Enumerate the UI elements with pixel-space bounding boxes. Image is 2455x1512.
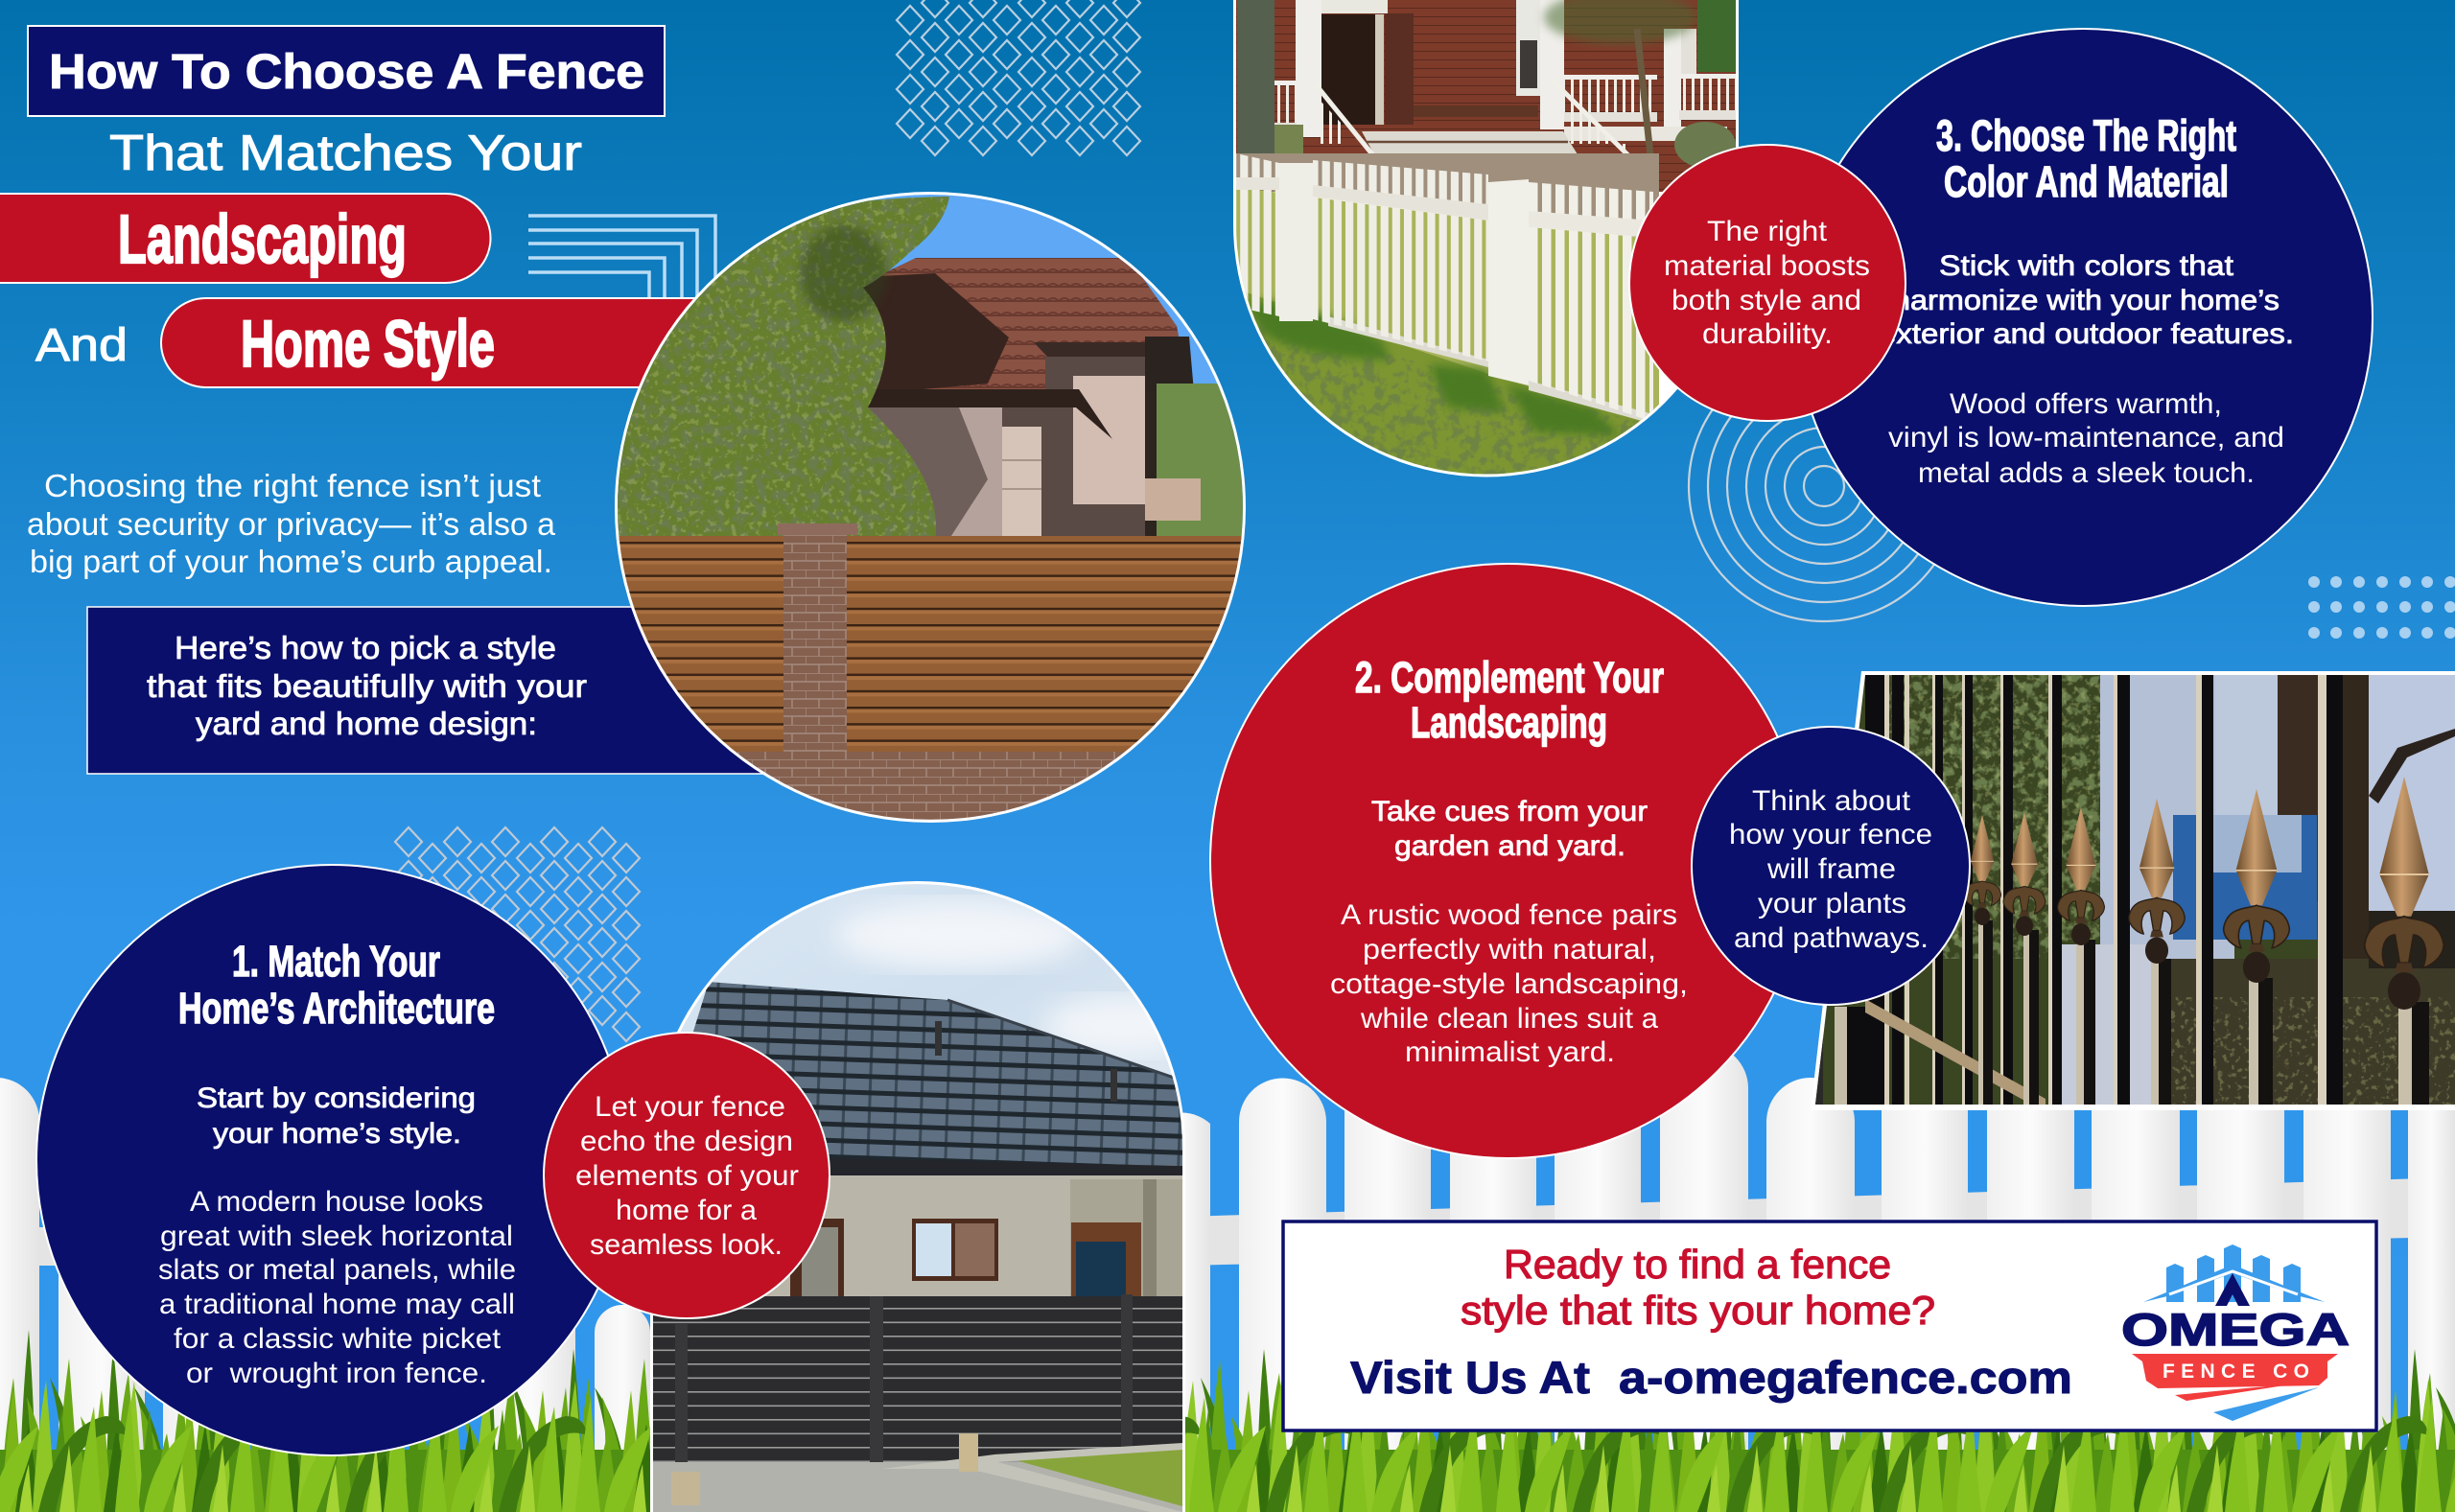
dot grid decoration <box>2308 576 2455 639</box>
panel: step 2 complement your landscaping: Landscaping <box>1411 698 1607 747</box>
panel: step 2 complement your landscaping: while clean lines suit a <box>1360 1003 1658 1035</box>
photo: wrought iron fence <box>1811 671 2455 1112</box>
photo: white picket fence and porch <box>1232 0 1741 479</box>
call to action banner: style that fits your home? <box>1461 1288 1935 1333</box>
grass: right <box>1185 1320 2455 1512</box>
intro paragraph: big part of your home’s curb appeal. <box>30 544 552 579</box>
callout circle: frame your plants <box>1692 727 1970 1005</box>
call to action banner: Visit Us At <box>1350 1352 1590 1403</box>
call to action banner <box>1283 1221 2376 1431</box>
panel: step 1 match your architecture: your home’s style. <box>213 1118 461 1150</box>
panel: step 2 complement your landscaping: perfectly with natural, <box>1363 934 1656 965</box>
photo: modern house with dark slat fence <box>647 877 1199 1512</box>
decorative diamond pattern: top <box>897 0 1140 155</box>
photo: house with wood fence <box>614 187 1248 828</box>
panel: step 1 match your architecture: a traditional home may call <box>159 1289 515 1320</box>
panel: step 1 match your architecture: for a classic white picket <box>174 1323 502 1355</box>
panel: step 1 match your architecture: Start by considering <box>197 1082 476 1114</box>
panel: step 3 color and material: 3. Choose The Right <box>1936 111 2236 160</box>
callout circle: frame your plants: and pathways. <box>1734 922 1929 954</box>
decorative diamond pattern: left <box>395 827 640 1041</box>
concentric circle decoration <box>1689 351 1959 621</box>
logo: Omega Fence Co: OMEGA <box>2121 1304 2350 1355</box>
title box <box>28 26 665 116</box>
callout circle: echo the design: seamless look. <box>590 1229 783 1261</box>
panel: step 1 match your architecture <box>36 865 627 1455</box>
callout circle: material boosts: durability. <box>1702 318 1833 350</box>
panel: step 2 complement your landscaping: cottage-style landscaping, <box>1330 968 1688 1000</box>
panel: step 1 match your architecture: slats or metal panels, while <box>158 1254 516 1286</box>
pill: Landscaping <box>0 194 491 283</box>
panel: step 2 complement your landscaping: 2. Complement Your <box>1355 653 1664 702</box>
callout box: how to pick <box>87 607 778 774</box>
callout circle: material boosts: both style and <box>1672 285 1861 316</box>
panel: step 1 match your architecture: great with sleek horizontal <box>160 1221 513 1252</box>
logo: Omega Fence Co: FENCE CO <box>2163 1361 2309 1383</box>
panel: step 2 complement your landscaping <box>1210 564 1805 1158</box>
panel: step 1 match your architecture: A modern house looks <box>190 1186 483 1218</box>
panel: step 2 complement your landscaping: Take cues from your <box>1371 796 1648 827</box>
callout box: how to pick: Here’s how to pick a style <box>175 630 556 665</box>
pill: Home Style <box>161 298 729 387</box>
pill: Landscaping: Landscaping <box>118 202 407 278</box>
panel: step 1 match your architecture: 1. Match Your <box>232 937 440 986</box>
panel: step 2 complement your landscaping: garden and yard. <box>1394 830 1625 862</box>
call to action banner: Ready to find a fence <box>1504 1242 1891 1287</box>
callout box: how to pick: yard and home design: <box>196 706 537 741</box>
panel: step 3 color and material: Stick with colors that <box>1939 250 2234 282</box>
panel: step 3 color and material: exterior and outdoor features. <box>1879 318 2294 350</box>
panel: step 2 complement your landscaping: A rustic wood fence pairs <box>1341 899 1677 931</box>
logo: Omega Fence Co <box>2121 1244 2350 1421</box>
intro paragraph <box>27 468 556 579</box>
intro paragraph: Choosing the right fence isn’t just <box>44 468 541 503</box>
panel: step 3 color and material <box>1795 29 2373 606</box>
call to action banner: a-omegafence.com <box>1619 1352 2072 1403</box>
panel: step 3 color and material: Wood offers warmth, <box>1950 388 2222 420</box>
white picket fence <box>0 1040 2455 1512</box>
panel: step 3 color and material: metal adds a sleek touch. <box>1918 457 2255 489</box>
callout circle: frame your plants: Think about <box>1752 785 1911 817</box>
callout circle: material boosts: material boosts <box>1664 250 1870 282</box>
callout circle: echo the design <box>544 1033 830 1318</box>
callout circle: material boosts <box>1629 145 1906 421</box>
panel: step 2 complement your landscaping: minimalist yard. <box>1405 1036 1615 1068</box>
label: And: And <box>35 320 128 371</box>
panel: step 1 match your architecture: or wrought iron fence. <box>186 1358 487 1389</box>
subtitle: That Matches Your: That Matches Your <box>109 126 582 181</box>
callout circle: material boosts: The right <box>1707 216 1828 247</box>
intro paragraph: about security or privacy— it’s also a <box>27 506 556 542</box>
title box: How To Choose A Fence <box>49 44 644 99</box>
callout circle: frame your plants: your plants <box>1758 888 1906 919</box>
callout box: how to pick: that fits beautifully with your <box>147 668 587 704</box>
grass: left <box>0 1320 652 1512</box>
decorative corner lines <box>528 216 715 300</box>
panel: step 3 color and material: harmonize with your home’s <box>1893 285 2280 316</box>
panel: step 3 color and material: vinyl is low-maintenance, and <box>1888 422 2284 454</box>
callout circle: echo the design: home for a <box>616 1195 757 1226</box>
callout circle: echo the design: elements of your <box>575 1160 799 1192</box>
pill: Home Style: Home Style <box>241 307 495 381</box>
callout circle: frame your plants: will frame <box>1766 853 1896 885</box>
panel: step 3 color and material: Color And Material <box>1944 157 2229 206</box>
callout circle: echo the design: Let your fence <box>595 1091 785 1123</box>
callout circle: frame your plants: how your fence <box>1729 819 1932 850</box>
callout circle: echo the design: echo the design <box>580 1126 793 1157</box>
panel: step 1 match your architecture: Home’s Architecture <box>178 984 495 1033</box>
